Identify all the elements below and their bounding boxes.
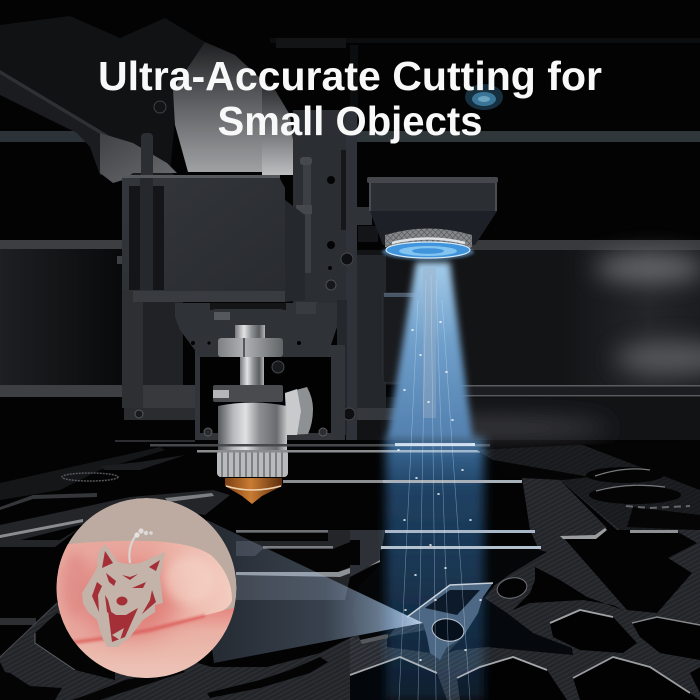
knurled lens ring with blue glow — [382, 228, 474, 260]
wolf pendant — [82, 528, 165, 647]
copper nozzle — [225, 478, 282, 504]
blue laser beam — [384, 262, 481, 700]
laser light column on plate — [386, 438, 484, 700]
laser module housing — [367, 177, 498, 245]
lower frame opening — [195, 345, 345, 440]
title: Ultra-Accurate Cutting for — [98, 53, 602, 99]
main head housing — [122, 133, 316, 325]
magnifier projection cone — [205, 520, 423, 663]
plate: lower-left metal — [0, 603, 215, 700]
plate: black holes in right metal — [350, 440, 700, 700]
cut pendant on plate — [360, 583, 493, 660]
plate: central dark hole beneath beam — [352, 550, 573, 655]
plate: central metal and bars — [236, 530, 385, 600]
vertical carriage plate — [286, 110, 378, 440]
plate: right metal — [440, 445, 700, 700]
left frame and side panel — [117, 253, 196, 420]
magnified inset: fingertip photo — [56, 498, 236, 678]
title: Small Objects — [218, 98, 482, 144]
silver ball-head assembly — [213, 325, 313, 477]
bright bars across the column — [381, 443, 541, 549]
plate: lower-mid metal — [180, 622, 570, 700]
title — [98, 53, 602, 144]
gantry beam — [0, 16, 503, 183]
plate: left strips — [0, 447, 230, 625]
plate: thin upper bars — [115, 440, 522, 483]
lower carriage plate — [175, 303, 337, 357]
